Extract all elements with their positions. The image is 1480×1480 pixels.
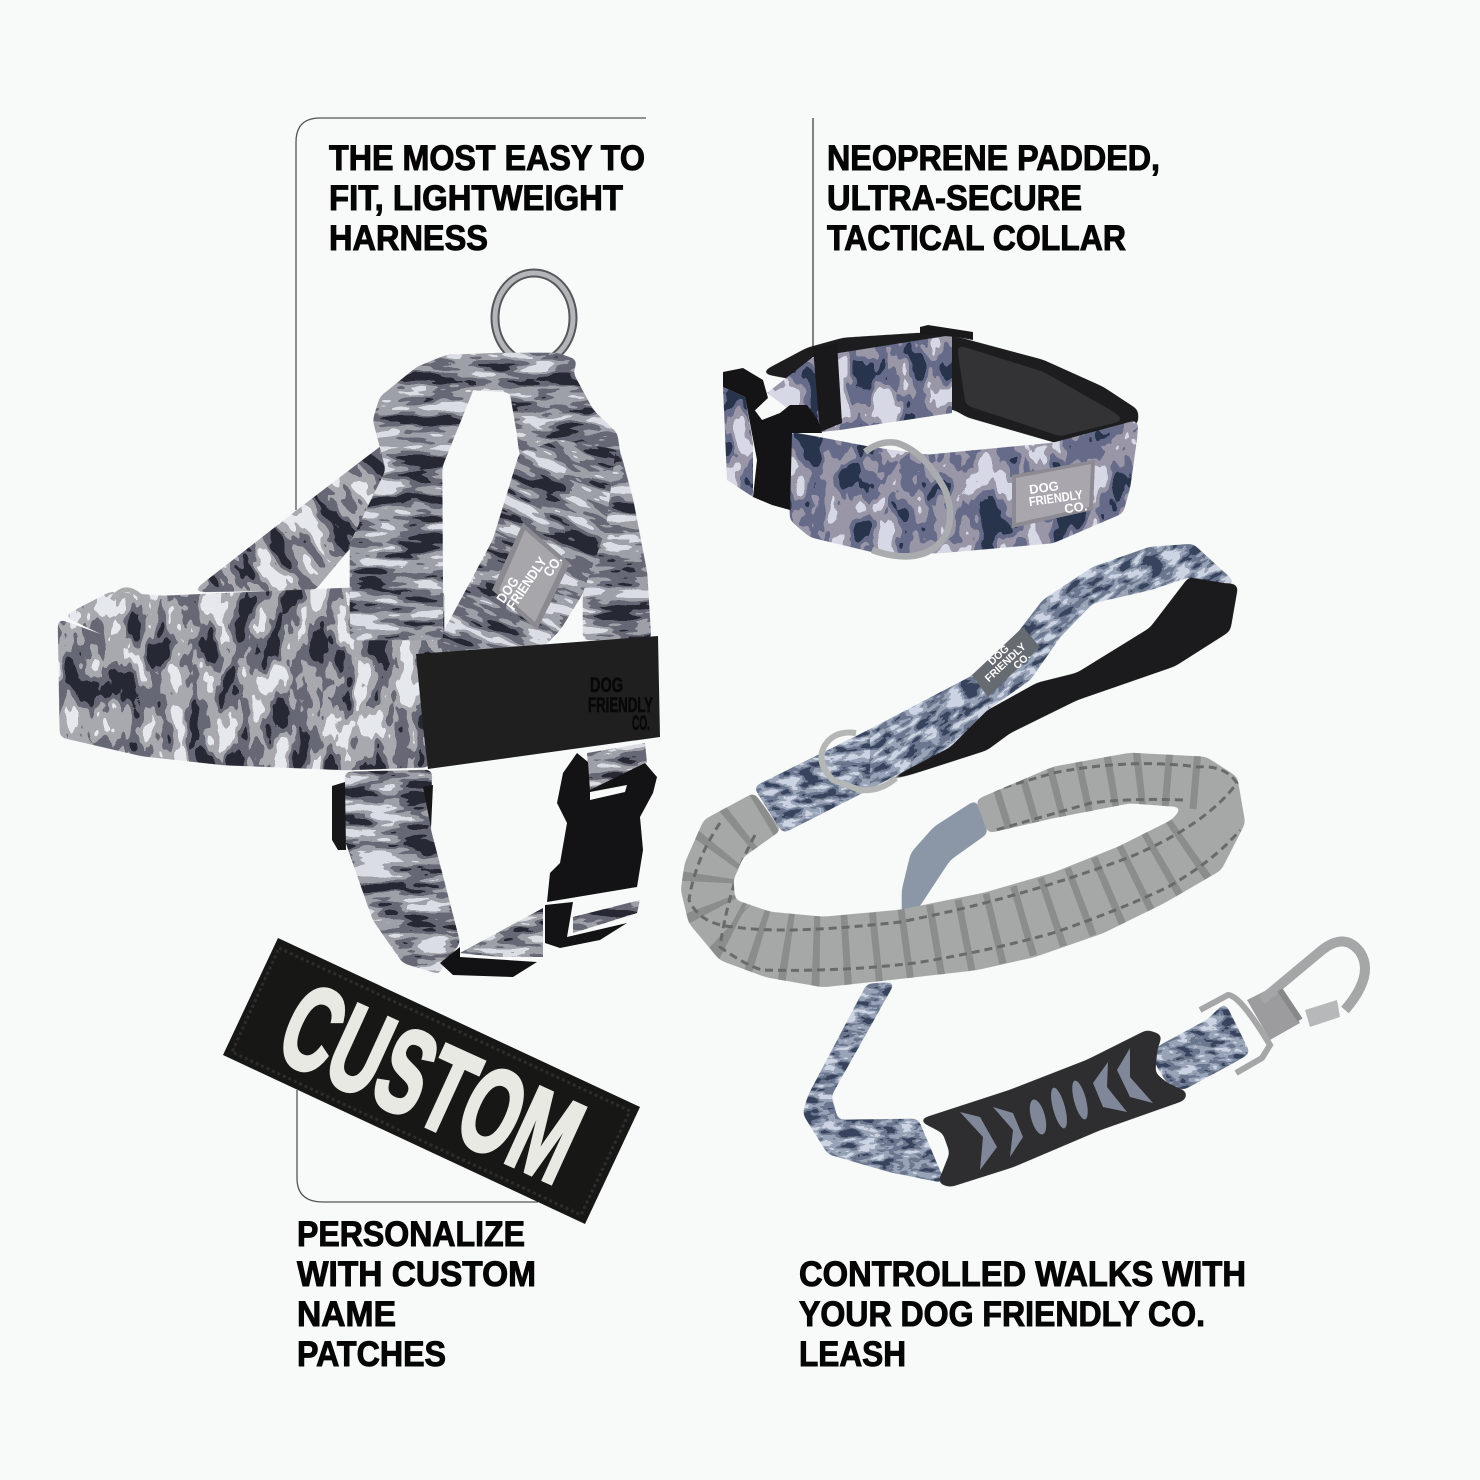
infographic canvas: [58, 117, 1370, 1367]
collar back band: [767, 336, 952, 432]
inner band: [68, 588, 444, 656]
back strap: [198, 446, 385, 592]
callout: patches: PERSONALIZE: [297, 1215, 525, 1254]
bottom tip: [440, 947, 537, 977]
bottom strap: [460, 900, 640, 957]
callout: collar: [827, 139, 1160, 258]
handle neoprene: [858, 577, 1238, 795]
callout: patches: WITH CUSTOM: [297, 1255, 536, 1294]
crossing webbing: [902, 800, 988, 925]
lower left strap: [344, 770, 460, 973]
patch logo: [588, 674, 653, 735]
collar woven label: [1012, 460, 1095, 528]
callout: patches: PATCHES: [297, 1335, 446, 1374]
snap hook: [1200, 941, 1365, 1073]
callout: leash: [799, 1255, 1246, 1374]
callout: leash: LEASH: [799, 1335, 906, 1374]
harness connector line: [296, 118, 646, 1202]
custom name patch: CUSTOM: [261, 958, 601, 1209]
handle label: DOG: [986, 643, 1012, 668]
collar neoprene lining: [760, 333, 1138, 443]
handle label: CO.: [1011, 650, 1033, 672]
callout: leash: CONTROLLED WALKS WITH: [799, 1255, 1246, 1294]
rubber grip: [918, 1030, 1187, 1187]
harness woven label: [492, 523, 570, 630]
buckle lower part: [545, 902, 627, 948]
band d-ring: [112, 590, 140, 600]
collar woven label: CO.: [1063, 498, 1088, 516]
harness woven label: FRIENDLY: [503, 553, 550, 613]
top arch: [423, 352, 621, 455]
callout: collar: ULTRA-SECURE: [827, 179, 1082, 218]
handle label: FRIENDLY: [983, 641, 1029, 685]
left keeper: [332, 782, 433, 850]
collar front band: [790, 421, 1138, 554]
patch logo: CO.: [632, 712, 650, 735]
bungee section: [681, 753, 1245, 987]
harness woven label: CO.: [540, 552, 565, 579]
callout: harness: [329, 139, 645, 258]
custom name patch: [223, 938, 640, 1224]
handle end over bungee: [756, 730, 870, 832]
callout: harness: HARNESS: [329, 219, 488, 258]
right strap: [442, 440, 632, 652]
callout: patches: [297, 1215, 536, 1374]
handle label: [972, 627, 1040, 697]
harness ring: [495, 273, 573, 363]
black leather patch: [416, 636, 660, 769]
side release buckle: [547, 753, 657, 902]
collar woven label: DOG: [1028, 478, 1060, 497]
collar: [720, 325, 1145, 560]
handle webbing: [756, 544, 1232, 832]
collar connector line: [812, 118, 814, 350]
lower leash webbing and end strip: [804, 982, 1248, 1182]
collar left band: [723, 387, 753, 497]
callout: collar: TACTICAL COLLAR: [827, 219, 1126, 258]
left chest strap: [350, 355, 473, 640]
upper right lower strap: [587, 743, 647, 792]
main belly band: [58, 620, 428, 770]
collar d-ring: [865, 442, 950, 556]
callout: harness: THE MOST EASY TO: [329, 139, 645, 178]
collar woven label: FRIENDLY: [1028, 487, 1084, 509]
leash d-ring: [821, 732, 896, 790]
callout: harness: FIT, LIGHTWEIGHT: [329, 179, 623, 218]
callout: patches: NAME: [297, 1295, 396, 1334]
collar keeper: [813, 343, 842, 432]
callout: leash: YOUR DOG FRIENDLY CO.: [799, 1295, 1205, 1334]
collar buckle: [723, 368, 822, 510]
patch logo: DOG: [590, 674, 623, 697]
patch logo: FRIENDLY: [588, 694, 653, 717]
collar top slider: [920, 325, 973, 340]
leash: [681, 544, 1370, 1186]
harness woven label: DOG: [493, 574, 522, 606]
harness: [58, 268, 660, 977]
outer right strap: [582, 452, 651, 640]
callout: collar: NEOPRENE PADDED,: [827, 139, 1160, 178]
